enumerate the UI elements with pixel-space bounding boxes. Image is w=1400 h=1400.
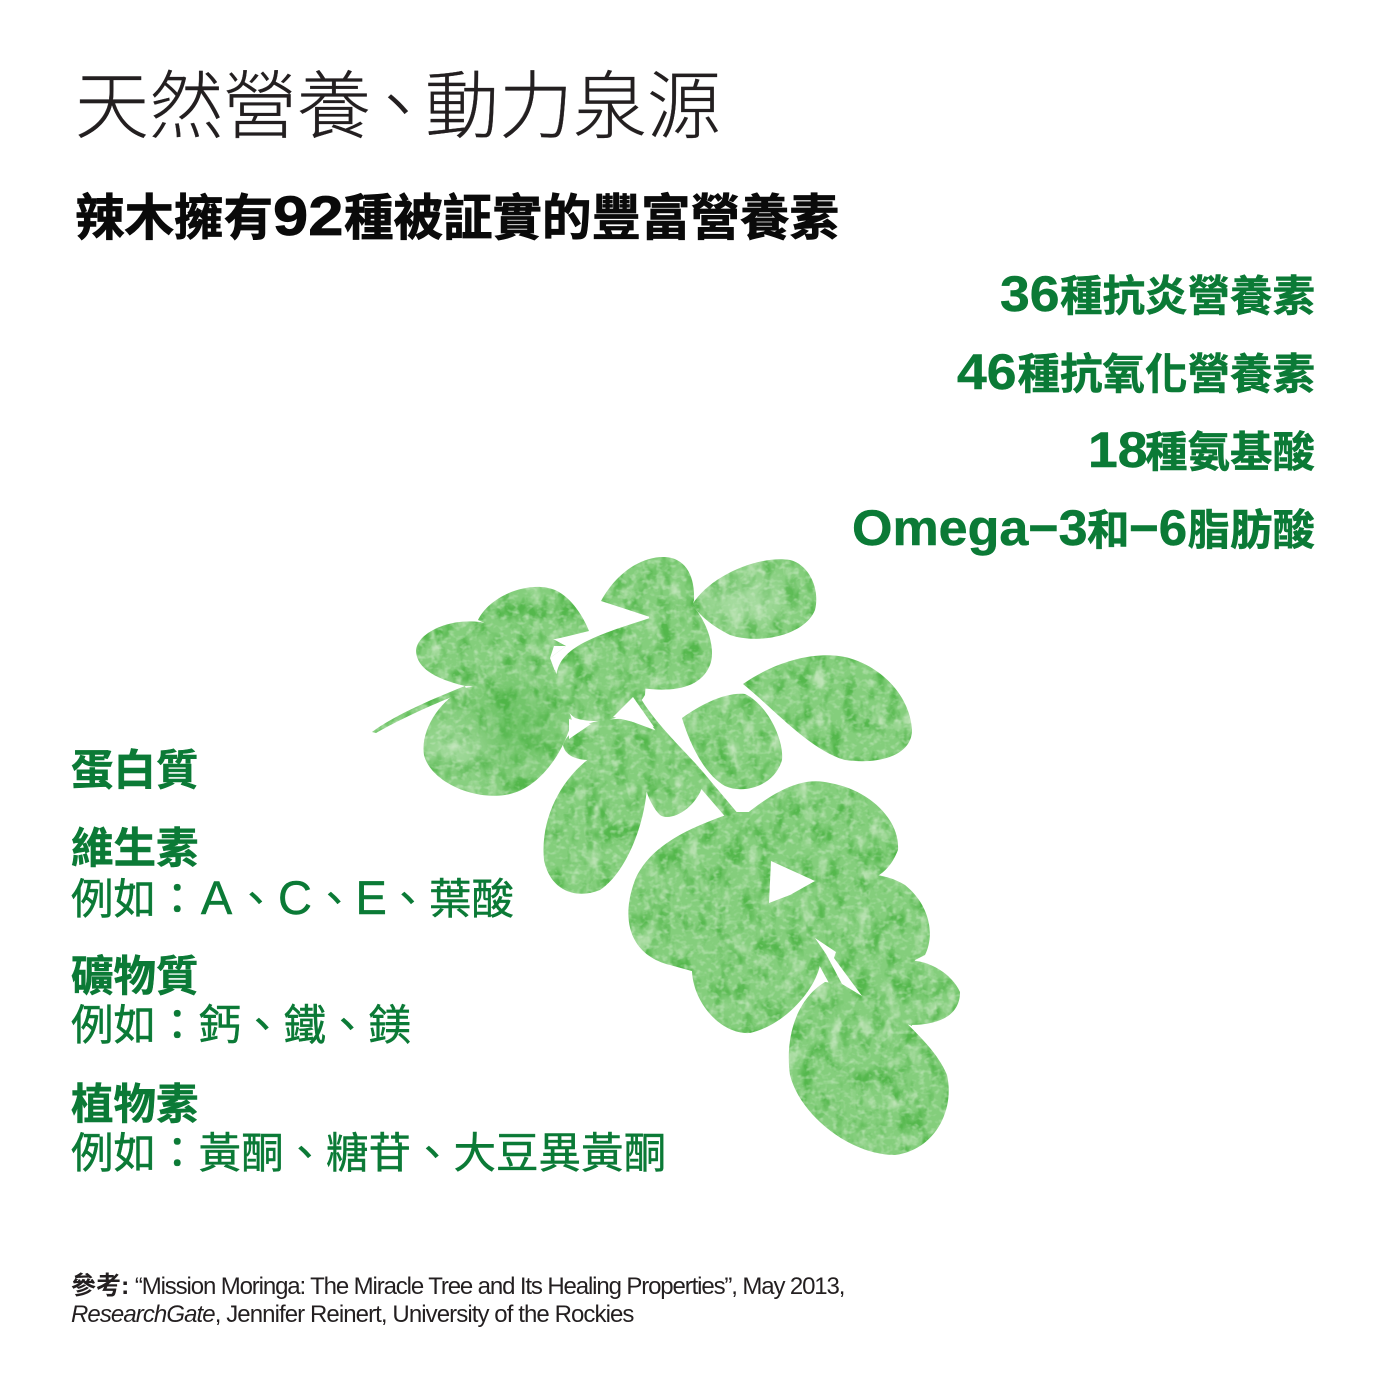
vitamin examples: 例如： 、 、 、葉酸 — [71, 877, 514, 924]
nutrient count: omega fatty acids — [852, 500, 1315, 556]
vitamin examples: A — [201, 871, 232, 924]
category: vitamins: 維生素 — [71, 826, 199, 873]
nutrient count: omega fatty acids: 和 脂肪酸 — [1087, 508, 1315, 555]
mineral examples: 例如：鈣、鐵、鎂 — [71, 1003, 411, 1050]
nutrient count: antioxidant — [957, 344, 1315, 400]
list: nutrient counts — [852, 266, 1315, 556]
nutrient count: omega fatty acids: −6 — [1129, 500, 1188, 556]
title: 天然營養 — [75, 65, 371, 148]
category: minerals: 礦物質 — [71, 954, 199, 1001]
nutrient count: antioxidant: 種抗氧化營養素 — [1017, 352, 1315, 399]
list: nutrient categories — [71, 748, 666, 1178]
category: protein: 蛋白質 — [71, 748, 199, 795]
vitamin examples: C — [278, 871, 312, 924]
nutrient count: anti-inflammatory — [1000, 266, 1315, 322]
reference note — [71, 1272, 844, 1328]
nutrient count: antioxidant: 46 — [957, 344, 1017, 400]
title: 動力泉源 — [425, 65, 721, 148]
nutrient count: anti-inflammatory: 36 — [1000, 266, 1060, 322]
vitamin examples: E — [356, 871, 387, 924]
nutrient count: amino acids — [1088, 422, 1315, 478]
nutrient count: anti-inflammatory: 種抗炎營養素 — [1060, 274, 1315, 321]
reference note: ResearchGate, Jennifer Reinert, University of the Rockies — [71, 1301, 634, 1328]
phytochemical examples: 例如：黃酮、糖苷、大豆異黃酮 — [71, 1131, 666, 1178]
title — [75, 65, 721, 148]
subtitle: 辣木擁有 種被証實的豐富營養素 — [75, 191, 839, 246]
illustration: moringa branch — [372, 557, 960, 1155]
title: 、 — [361, 65, 435, 148]
nutrient count: omega fatty acids: Omega−3 — [852, 500, 1088, 556]
leaf gaps — [550, 646, 862, 996]
subtitle: 92 — [273, 184, 343, 247]
nutrient count: amino acids: 種氨基酸 — [1145, 430, 1315, 477]
category: phytochemicals: 植物素 — [71, 1082, 199, 1129]
reference note: 參考: “Mission Moringa: The Miracle Tree and Its Healing Properties”, May 2013, — [71, 1272, 844, 1300]
nutrient count: amino acids: 18 — [1088, 422, 1148, 478]
